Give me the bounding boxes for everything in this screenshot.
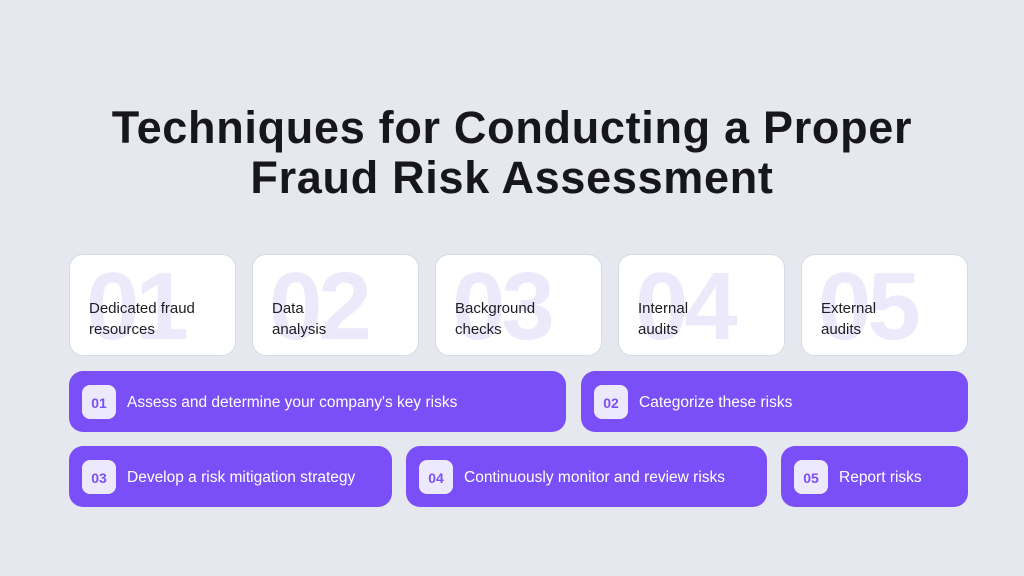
card: 01: Dedicated fraud [89, 300, 195, 317]
step 03: 03 [91, 470, 107, 486]
card: 05: External [821, 300, 876, 317]
step 05 [781, 446, 968, 507]
step 02: 02 [603, 395, 619, 411]
title [112, 102, 912, 203]
card: 03: Background [455, 300, 535, 317]
step 01: Assess and determine your company's key risks [127, 394, 457, 411]
step 04: Continuously monitor and review risks [464, 469, 725, 486]
card: 05: audits [821, 321, 861, 338]
step 02: Categorize these risks [639, 394, 792, 411]
card: 01 [69, 254, 236, 356]
card: 03 [435, 254, 602, 356]
card: 02 [252, 254, 419, 356]
card: 04: Internal [638, 300, 688, 317]
card: 01: resources [89, 321, 155, 338]
step 03: Develop a risk mitigation strategy [127, 469, 355, 486]
step 02 [581, 371, 968, 432]
step 04: 04 [428, 470, 444, 486]
step 01 [69, 371, 566, 432]
step 01: 01 [91, 395, 107, 411]
step 05: 05 [803, 470, 819, 486]
step 04 [406, 446, 767, 507]
step 03 [69, 446, 392, 507]
card: 05 [801, 254, 968, 356]
title: Fraud Risk Assessment [250, 152, 774, 203]
step 05: Report risks [839, 469, 922, 486]
title: Techniques for Conducting a Proper [112, 102, 912, 153]
card: 02: Data [272, 300, 304, 317]
card: 04: audits [638, 321, 678, 338]
card: 02: analysis [272, 321, 326, 338]
card: 04 [618, 254, 785, 356]
card: 03: checks [455, 321, 502, 338]
